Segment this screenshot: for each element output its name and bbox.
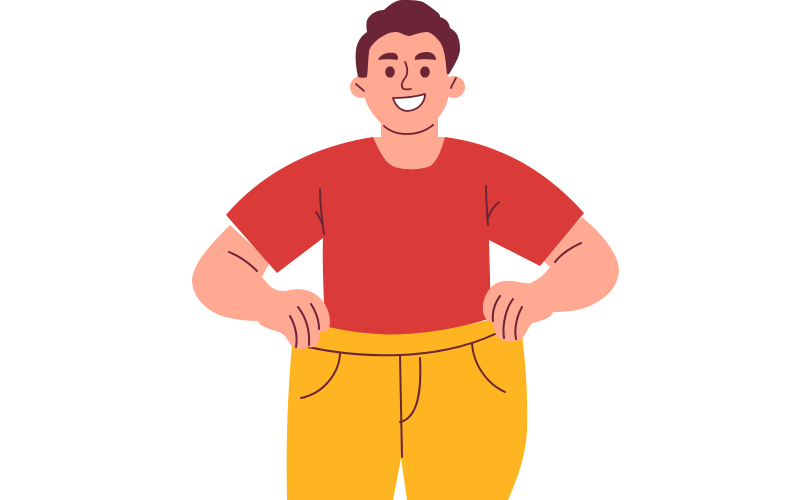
eyebrows: [378, 52, 436, 60]
face details: [356, 52, 456, 134]
hair: [356, 0, 460, 78]
creases and fingers: [229, 186, 581, 347]
eyes: [385, 66, 395, 78]
left arm: [192, 225, 280, 321]
mouth: [393, 94, 425, 111]
right fingers: [493, 296, 500, 321]
face: [363, 28, 449, 134]
left fingers: [290, 316, 297, 347]
elbow creases: [229, 252, 257, 271]
shirt folds: [320, 189, 324, 234]
left hand: [250, 286, 330, 349]
neck: [373, 115, 445, 169]
right arm: [532, 217, 619, 312]
red t-shirt: [226, 137, 584, 334]
nose, ear and chin lines: [356, 62, 456, 134]
ears: [350, 76, 465, 98]
trousers: [287, 318, 527, 500]
right hand: [483, 279, 560, 341]
